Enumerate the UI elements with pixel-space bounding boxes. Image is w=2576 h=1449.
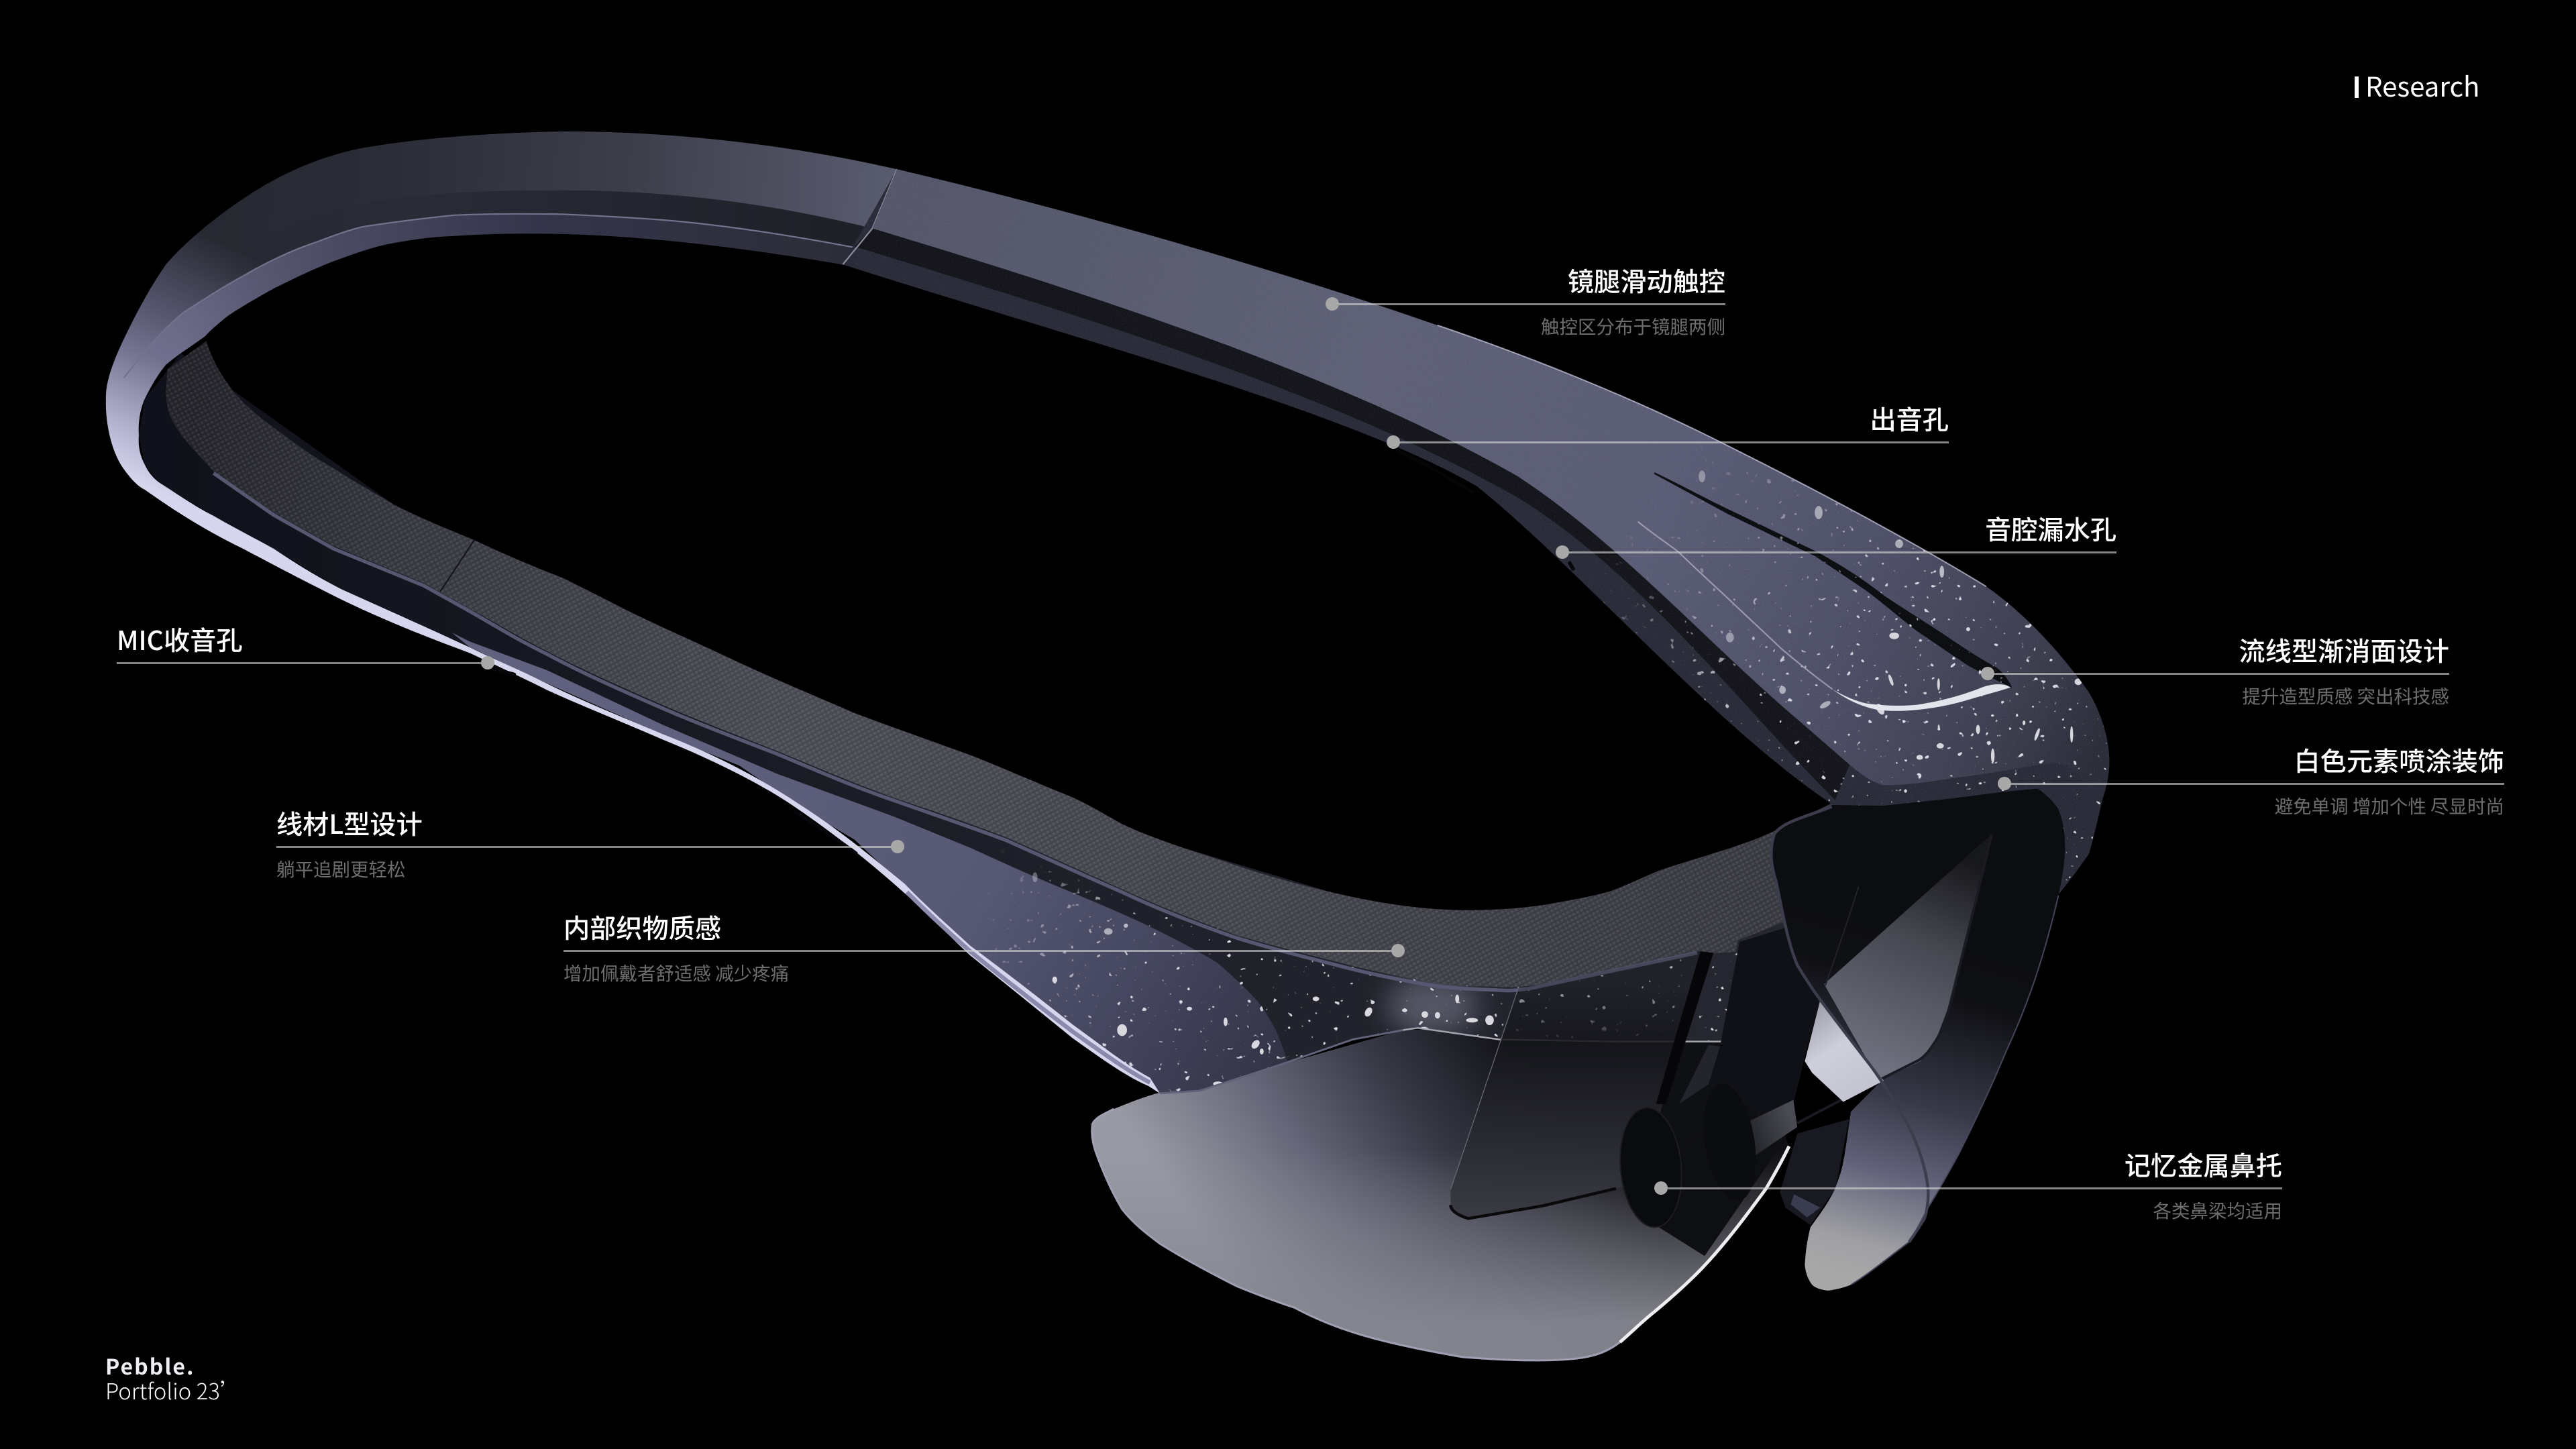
lens insert <box>1824 835 1992 1079</box>
nose bridge frame <box>1656 926 1849 1256</box>
callout: 镜腿滑动触控: 触控区分布于镜腿两侧 <box>1541 312 1725 339</box>
callout: 音腔漏水孔 <box>1556 510 2116 559</box>
footer: brand: Portfolio 23’ <box>105 1374 242 1406</box>
callout: 镜腿滑动触控: 镜腿滑动触控 <box>1568 262 1725 299</box>
panel: temple surface <box>854 156 2119 912</box>
bright reflection <box>1805 1000 1884 1102</box>
temple underside and groove <box>843 169 2109 894</box>
callout: 白色元素喷涂装饰: 白色元素喷涂装饰 <box>2294 741 2504 779</box>
panel: inner speckled surface <box>139 354 1790 1101</box>
callout: MIC收音孔 <box>117 621 494 669</box>
callout: 白色元素喷涂装饰 <box>1998 741 2504 818</box>
right lens <box>1771 789 2065 1291</box>
callout: 流线型渐消面设计: 提升造型质感 突出科技感 <box>2242 682 2449 708</box>
callout: 出音孔 <box>1387 400 1949 449</box>
groove <box>190 191 872 291</box>
bright lens edge <box>1620 1146 1789 1342</box>
rim <box>148 214 857 365</box>
callout: 音腔漏水孔: 音腔漏水孔 <box>1985 510 2116 547</box>
product illustration: glasses <box>106 131 2109 1362</box>
nose pads <box>1615 1080 1764 1230</box>
callout: 线材L型设计: 躺平追剧更轻松 <box>276 855 405 881</box>
fabric inner band <box>166 341 1856 991</box>
footer: brand: Pebble. <box>105 1350 195 1381</box>
callout: 内部织物质感: 增加佩戴者舒适感 减少疼痛 <box>564 959 789 985</box>
outer shell and lit edge ribbon <box>106 131 1160 1093</box>
crease <box>1654 473 2010 686</box>
callout: 线材L型设计 <box>276 804 904 881</box>
callout: 内部织物质感: 内部织物质感 <box>564 908 721 946</box>
bright swoosh <box>1638 522 1833 689</box>
callout: 记忆金属鼻托: 记忆金属鼻托 <box>2125 1146 2282 1183</box>
callout: 内部织物质感 <box>564 908 1405 985</box>
callout: 出音孔: 出音孔 <box>1870 400 1949 437</box>
callout: 镜腿滑动触控 <box>1326 262 1725 339</box>
callout: MIC收音孔: MIC收音孔 <box>117 621 243 658</box>
header: Research: Research <box>2365 65 2479 105</box>
callout: 白色元素喷涂装饰: 避免单调 增加个性 尽显时尚 <box>2275 792 2504 818</box>
near lens insert <box>1450 951 1701 1218</box>
callout: 记忆金属鼻托: 各类鼻梁均适用 <box>2153 1196 2282 1223</box>
near lens <box>1092 1018 1789 1360</box>
mic hole and speaker slot <box>493 669 856 853</box>
clip <box>1746 1100 1797 1156</box>
callout: 流线型渐消面设计 <box>1981 631 2449 708</box>
callout: 线材L型设计: 线材L型设计 <box>276 804 423 842</box>
callout: 流线型渐消面设计: 流线型渐消面设计 <box>2239 631 2449 669</box>
callout: 记忆金属鼻托 <box>1654 1146 2282 1223</box>
footer: brand <box>105 1350 242 1406</box>
